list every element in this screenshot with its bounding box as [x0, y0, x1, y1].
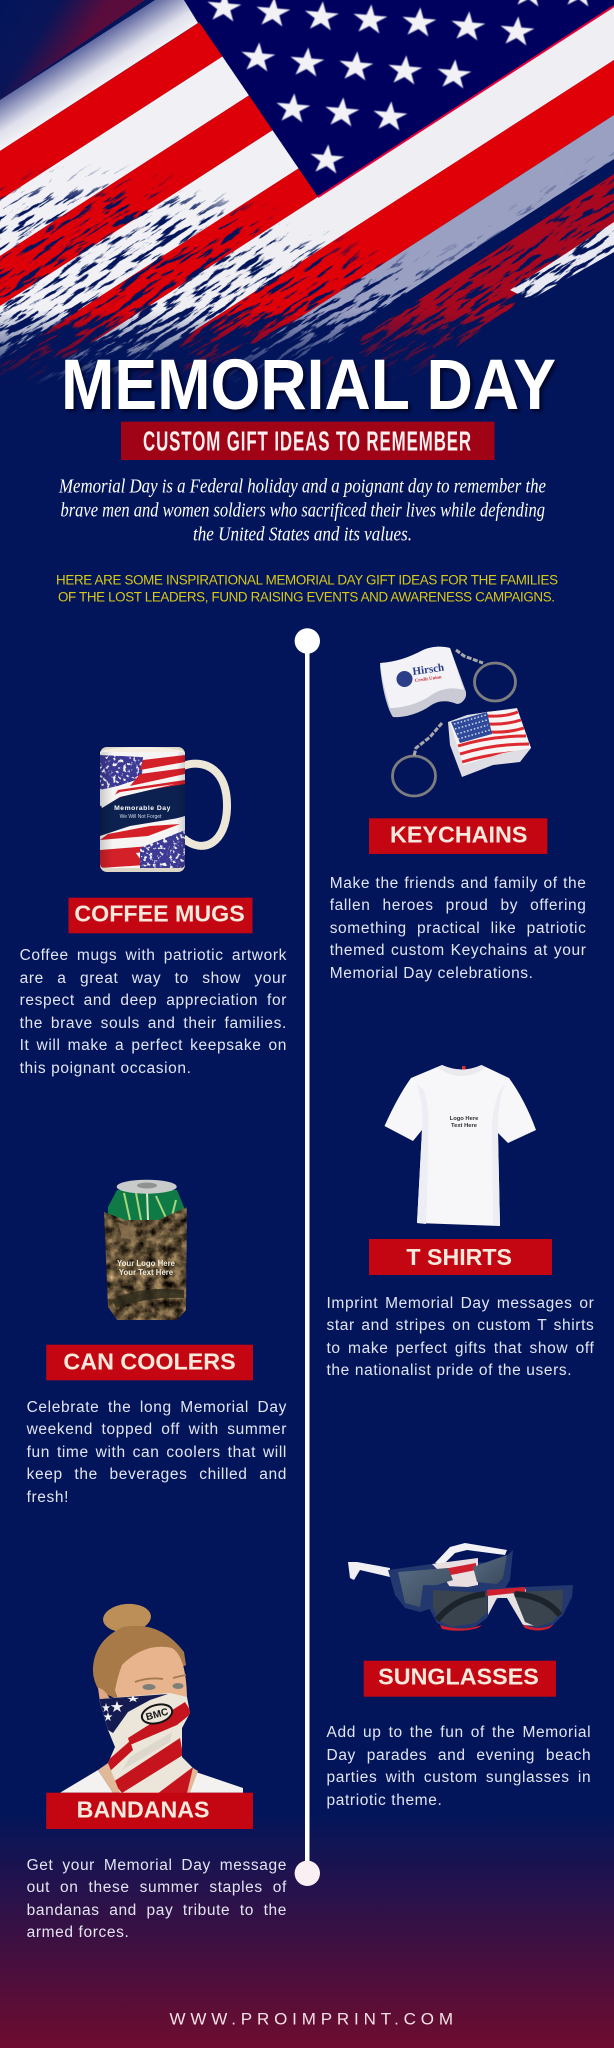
icon: coffee mug: We Will Not Forget	[120, 814, 162, 820]
icon: keychains	[380, 647, 532, 796]
text block: t shirts: star and stripes on custom T shirts	[326, 1317, 594, 1334]
flag canton with stars	[184, 0, 614, 197]
yellow intro callout	[56, 572, 558, 605]
text block: can coolers	[26, 1399, 287, 1506]
heading: coffee mugs: COFFEE MUGS	[74, 901, 245, 927]
text block: coffee mugs: respect and deep appreciation for	[20, 992, 287, 1009]
heading: t shirts	[369, 1239, 552, 1275]
text block: t shirts: Imprint Memorial Day messages or	[326, 1295, 594, 1312]
heading: keychains	[369, 818, 547, 854]
text block: keychains: Make the friends and family of the	[330, 875, 586, 892]
icon: keychains: Credit Union	[415, 675, 442, 684]
text block: coffee mugs: are a great way to show your	[20, 970, 287, 987]
text block: sunglasses	[326, 1724, 591, 1809]
footer website: WWW.PROIMPRINT.COM	[170, 2009, 453, 2028]
text block: coffee mugs: this poignant occasion.	[20, 1060, 192, 1077]
text block: coffee mugs: the brave souls and their families.	[20, 1015, 287, 1032]
text block: sunglasses: Day parades and evening beach	[326, 1747, 591, 1764]
heading: keychains: KEYCHAINS	[390, 821, 527, 847]
heading: can coolers	[46, 1345, 253, 1380]
text block: can coolers: Celebrate the long Memorial Day	[27, 1399, 287, 1416]
text block: keychains: fallen heroes proud by offering	[330, 897, 586, 914]
icon: can cooler: Your Logo Here	[117, 1259, 176, 1268]
text block: coffee mugs	[20, 947, 287, 1077]
text block: t shirts: the nationalist pride of the users.	[326, 1362, 572, 1379]
icon: coffee mug	[100, 747, 227, 872]
intro script paragraph: Memorial Day is a Federal holiday and a poignant day to remember the	[58, 477, 546, 498]
text block: sunglasses: parties with custom sunglasses in	[326, 1769, 591, 1786]
text block: can coolers: keep the beverages chilled and	[27, 1466, 287, 1483]
text block: can coolers: fun time with can coolers that will	[27, 1444, 287, 1461]
heading: sunglasses: SUNGLASSES	[378, 1664, 539, 1690]
timeline spine with dots	[295, 628, 320, 1886]
text block: sunglasses: Add up to the fun of the Memorial	[326, 1724, 591, 1741]
icon: woman wearing a flag bandana: BMC	[145, 1707, 170, 1723]
intro script paragraph	[58, 477, 546, 546]
grunge mottling on stripes	[0, 0, 614, 651]
text block: bandanas	[27, 1857, 287, 1941]
text block: bandanas: Get your Memorial Day message	[27, 1857, 287, 1874]
text block: keychains	[330, 875, 586, 982]
text block: keychains: themed custom Keychains at your	[330, 942, 586, 959]
text block: bandanas: bandanas and pay tribute to the	[27, 1902, 287, 1919]
text block: t shirts	[326, 1295, 594, 1379]
text block: bandanas: out on these summer staples of	[27, 1879, 287, 1896]
header flag image	[0, 0, 614, 961]
icon: sunglasses	[348, 1543, 573, 1631]
icon: can cooler	[104, 1180, 187, 1320]
text block: can coolers: weekend topped off with summer	[27, 1421, 287, 1438]
text block: coffee mugs: Coffee mugs with patriotic artwork	[20, 947, 287, 964]
intro script paragraph: the United States and its values.	[193, 525, 412, 546]
text block: bandanas: armed forces.	[27, 1924, 129, 1941]
text block: keychains: something practical like patriotic	[330, 920, 586, 937]
icon: woman wearing a flag bandana	[60, 1602, 243, 1794]
title: Memorial Day: MEMORIAL DAY	[61, 346, 556, 425]
text block: sunglasses: patriotic theme.	[326, 1792, 442, 1809]
grunge fade into navy	[0, 0, 614, 961]
text block: can coolers: fresh!	[27, 1489, 69, 1506]
icon: can cooler: Your Text Here	[119, 1268, 174, 1277]
subtitle banner	[121, 422, 494, 460]
icon: coffee mug: Memorable Day	[114, 805, 171, 812]
icon: t shirt	[384, 1065, 536, 1226]
icon: t shirt: Logo Here	[450, 1116, 479, 1122]
icon: t shirt: Text Here	[451, 1123, 478, 1129]
heading: sunglasses	[364, 1661, 556, 1697]
yellow intro callout: OF THE LOST LEADERS, FUND RAISING EVENTS AND AWARENESS CAMPAIGNS.	[58, 590, 555, 605]
text block: t shirts: to make perfect gifts that show off	[326, 1340, 594, 1357]
heading: coffee mugs	[68, 898, 252, 933]
heading: can coolers: CAN COOLERS	[63, 1348, 236, 1374]
heading: bandanas: BANDANAS	[77, 1797, 210, 1823]
heading: bandanas	[46, 1793, 253, 1829]
yellow intro callout: HERE ARE SOME INSPIRATIONAL MEMORIAL DAY GIFT IDEAS FOR THE FAMILIES	[56, 572, 558, 587]
icon: keychains: Hirsch	[412, 662, 445, 678]
text block: coffee mugs: It will make a perfect keepsake on	[20, 1037, 287, 1054]
heading: t shirts: T SHIRTS	[406, 1244, 512, 1270]
text block: keychains: Memorial Day celebrations.	[330, 965, 534, 982]
